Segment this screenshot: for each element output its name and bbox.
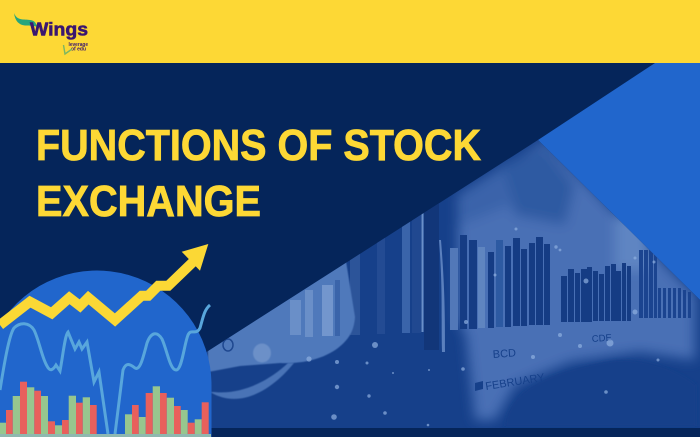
logo check mark — [64, 45, 72, 54]
bokeh particles — [306, 228, 660, 426]
title line 2: EXCHANGE — [36, 177, 261, 226]
photo base tone — [205, 135, 700, 428]
bar group three — [639, 250, 691, 318]
yellow rising arrow — [0, 244, 208, 325]
bar group one — [460, 235, 550, 329]
chart label: BCD: BCD — [492, 347, 516, 361]
logo: Wings by Leverage Edu: of edu — [71, 46, 86, 52]
hand palm and fingers — [208, 255, 355, 372]
title — [36, 121, 481, 226]
logo tagline: leverage — [68, 42, 88, 48]
logo wordmark: Wings — [30, 20, 88, 40]
bar group two — [561, 263, 631, 322]
red bars — [6, 382, 209, 434]
bar series — [0, 382, 209, 434]
photo panel: hand over stock charts — [205, 135, 700, 428]
title line 1: FUNCTIONS OF STOCK — [36, 121, 481, 170]
light blue trend line — [0, 305, 210, 434]
finger strips — [290, 300, 301, 335]
chart label: CDE: CDE — [591, 333, 612, 345]
green bars — [0, 386, 202, 434]
arrow shaft — [0, 261, 194, 325]
legend square — [475, 381, 483, 391]
blue triangle accent — [538, 63, 700, 300]
background bar strips — [350, 200, 458, 352]
arrow head — [182, 244, 208, 271]
logo swoosh — [14, 13, 37, 27]
bottom baseline — [0, 434, 211, 437]
blue circle backdrop — [0, 271, 212, 437]
thumb — [253, 344, 271, 362]
nail ring mark — [223, 339, 233, 351]
yellow header band — [0, 0, 700, 63]
cuff arc — [210, 363, 294, 399]
chart illustration — [0, 244, 212, 437]
logo: Wings by Leverage Edu — [14, 13, 88, 54]
chart label: FEBRUARY: FEBRUARY — [485, 372, 546, 393]
hand — [208, 255, 355, 399]
soft photo tones — [458, 140, 695, 420]
pie chart — [550, 358, 632, 376]
